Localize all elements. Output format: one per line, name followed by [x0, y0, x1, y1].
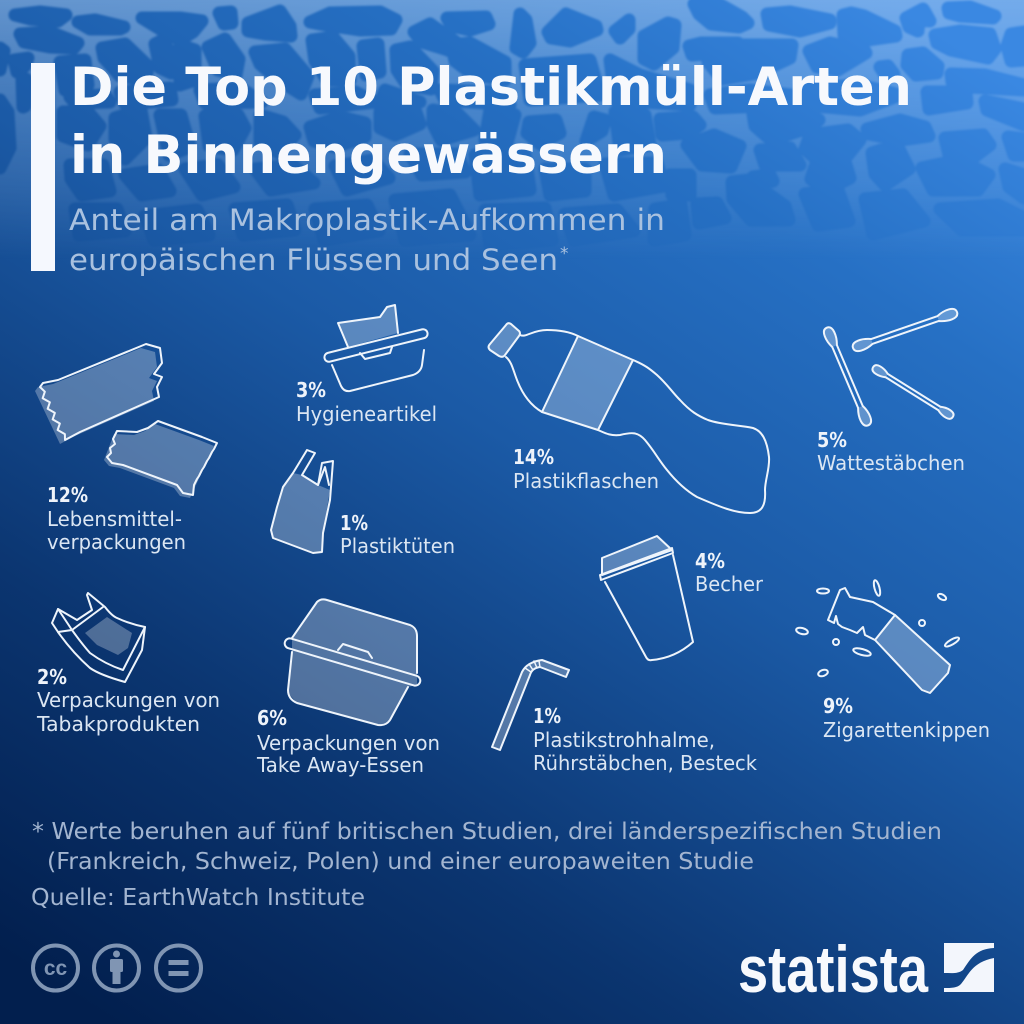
icon: cotton swabs: [822, 307, 959, 427]
label: verpackungen: [47, 530, 186, 554]
item: cups 4%: [600, 536, 764, 660]
label: Tabakprodukten: [36, 712, 200, 736]
item: cotton swabs 5%: [817, 307, 965, 475]
label: Plastiktüten: [340, 534, 455, 558]
icon: straw: [492, 660, 569, 750]
icon: cup: [600, 536, 693, 660]
label: Plastikflaschen: [513, 469, 659, 493]
percentage: 4%: [695, 549, 725, 573]
footnote: [32, 819, 942, 875]
label: Zigarettenkippen: [823, 718, 990, 742]
percentage: 6%: [257, 706, 287, 730]
percentage: 1%: [340, 511, 368, 535]
label: [256, 731, 440, 777]
label: Lebensmittel-: [47, 507, 182, 531]
title: [70, 57, 912, 186]
label: Becher: [695, 572, 764, 596]
icon: cigarette butt: [795, 580, 960, 693]
item: plastic bottles 14%: [488, 323, 769, 513]
icon: clamshell box: [283, 599, 422, 725]
label: [36, 688, 220, 736]
label: Take Away-Essen: [256, 753, 424, 777]
item: take away packaging 6%: [256, 599, 440, 777]
label: [47, 507, 186, 554]
subtitle: *: [560, 244, 568, 264]
statista logo: [738, 932, 994, 1006]
icon: bottle: [488, 323, 769, 513]
subtitle: [69, 203, 665, 277]
icon: cc: cc: [44, 957, 67, 980]
wordmark: statista: [738, 932, 929, 1006]
item: straws 1%: [492, 660, 757, 775]
creative commons icons: [33, 946, 201, 990]
label: Verpackungen von: [257, 731, 440, 755]
label: Hygieneartikel: [296, 402, 437, 426]
icon: wipes box: [323, 305, 429, 391]
source: Quelle: EarthWatch Institute: [31, 885, 365, 911]
icon: plastic bag: [271, 450, 333, 553]
title: Die Top 10 Plastikmüll-Arten: [70, 57, 912, 118]
item: hygiene 3%: [296, 305, 437, 426]
icon: share alike equals: [156, 946, 201, 990]
footnote: (Frankreich, Schweiz, Polen) und einer europaweiten Studie: [47, 849, 754, 875]
percentage: 14%: [513, 445, 554, 469]
label: Rührstäbchen, Besteck: [533, 751, 757, 775]
water pattern: [0, 0, 1024, 230]
item: cigarette butts 9%: [795, 580, 990, 742]
icon: cc: [33, 946, 78, 990]
logo mark: [944, 943, 994, 992]
icon: attribution: [94, 946, 139, 990]
subtitle: Anteil am Makroplastik-Aufkommen in: [69, 203, 665, 237]
icon: tobacco wrapper: [52, 593, 145, 682]
label: [533, 728, 757, 775]
percentage: 3%: [296, 378, 326, 402]
percentage: 5%: [817, 428, 847, 452]
item: plastic bags 1%: [271, 450, 455, 558]
percentage: 2%: [37, 665, 67, 689]
percentage: 12%: [47, 483, 88, 507]
icon: food wrappers: [35, 344, 217, 498]
subtitle: europäischen Flüssen und Seen: [69, 243, 558, 277]
item: tobacco packaging 2%: [36, 593, 220, 736]
label: Plastikstrohhalme,: [533, 728, 715, 752]
percentage: 1%: [533, 704, 561, 728]
label: Verpackungen von: [37, 688, 220, 712]
item: food packaging 12%: [35, 344, 217, 554]
title: in Binnengewässern: [70, 125, 667, 186]
percentage: 9%: [823, 694, 853, 718]
label: Wattestäbchen: [817, 451, 965, 475]
footnote: * Werte beruhen auf fünf britischen Studien, drei länderspezifischen Studien: [32, 819, 942, 845]
title accent bar: [31, 63, 55, 271]
